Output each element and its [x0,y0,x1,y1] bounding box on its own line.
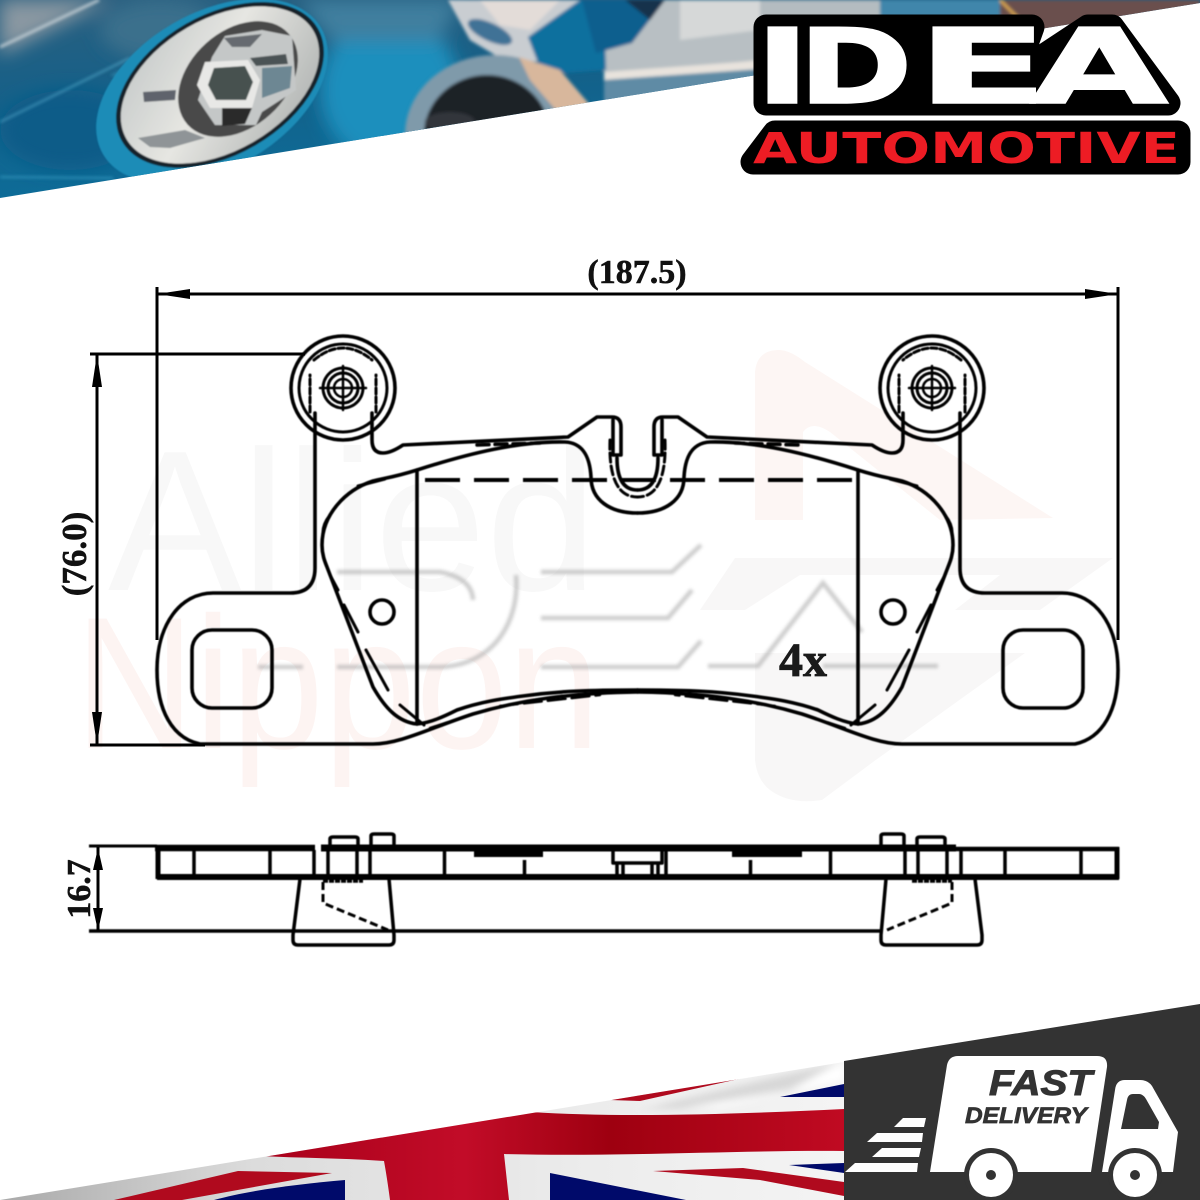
logo word IDEA: A [1030,6,1168,128]
thickness arrows [93,848,103,931]
quantity label 4x: 4x [779,634,827,687]
overall height dimension [55,354,305,745]
logo: IDEA AUTOMOTIVE [753,6,1180,174]
logo word IDEA: I [755,7,810,128]
logo word IDEA: D [798,6,913,128]
thickness dimension [61,847,103,931]
truck cab [1102,1080,1178,1172]
top view drawing of brake pad [157,336,1118,744]
thickness label: 16.7 [61,859,98,919]
watermarks [75,350,1113,801]
top banner: car photo [0,0,1200,198]
center clip [613,850,662,876]
plate ticks [194,850,1081,875]
dashed inner lines [323,882,952,930]
plate outline [89,846,1119,879]
flag red cross [260,1109,844,1200]
speed lines [845,1118,926,1172]
text DELIVERY: DELIVERY [965,1103,1090,1128]
logo word IDEA [755,6,1168,128]
front wheel [1108,1148,1162,1200]
door and fender blue [528,0,606,73]
overall width dimension [157,254,1118,640]
sky reflection [448,0,580,62]
logo word IDEA: E [916,6,1049,128]
width dimension lines [157,287,1118,640]
lower friction blocks [293,879,982,945]
logo black backing [753,27,1178,162]
height label: (76.0) [55,512,94,596]
height arrows [92,354,102,745]
top tabs [330,834,945,846]
UK flag strip [0,1060,845,1200]
dashed wear line [425,478,860,482]
cab window [1121,1094,1159,1129]
thickness line [96,847,100,931]
black bars [474,850,802,857]
right half of backing plate and pad [638,336,1118,744]
truck box [930,1056,1107,1172]
rear wheel [964,1148,1018,1200]
side view drawing of brake pad [89,834,1119,945]
delivery panel [844,1004,1200,1200]
flag white highlights and folds [660,1065,842,1110]
flag red diagonals [114,1068,844,1200]
logo word AUTOMOTIVE: AUTOMOTIVE [753,125,1180,174]
watermark: pink arrow [755,350,1053,520]
watermark: Allied: Allied [108,410,597,633]
icon: fast delivery truck [845,1056,1178,1200]
width label: (187.5) [587,254,687,291]
text FAST: FAST [989,1064,1095,1103]
headlight [96,0,328,177]
watermark: IDEA shadow edges [258,545,938,667]
base line [89,929,881,933]
flag blue sections [214,1084,844,1200]
height dimension lines [90,354,305,745]
left half of backing plate and pad [157,336,638,744]
watermark: Nippon: Nippon [75,578,600,788]
watermark: grey chevrons [700,558,1113,801]
wheel arch [403,10,572,132]
bodywork highlights [0,0,99,47]
width arrows [157,289,1118,299]
